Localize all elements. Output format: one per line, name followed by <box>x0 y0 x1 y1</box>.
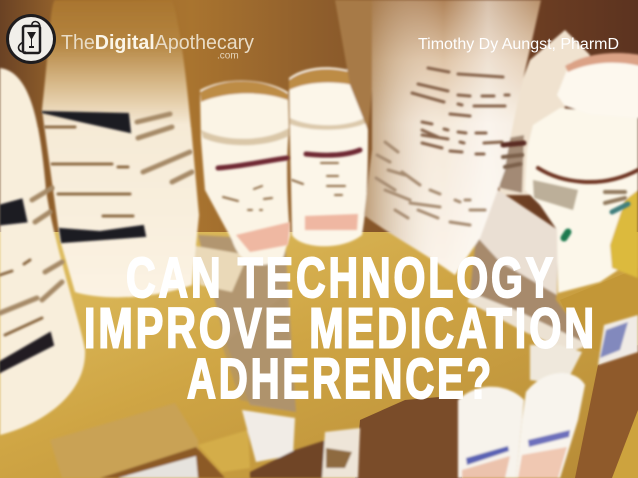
title: ADHERENCE? <box>187 347 494 411</box>
logo wordmark: TheDigitalApothecary <box>61 31 255 54</box>
far-left bottle <box>0 68 85 435</box>
author credit: Timothy Dy Aungst, PharmD <box>418 36 619 53</box>
logo .com: .com <box>217 50 239 62</box>
tan panel behind title, right <box>470 235 590 345</box>
logo: The Digital Apothecary <box>6 14 255 64</box>
yellow object right <box>610 190 638 278</box>
small bottle 1 <box>200 80 290 265</box>
large bottle <box>42 0 199 297</box>
logo badge <box>6 14 56 64</box>
white block <box>242 410 295 462</box>
photo: bottle labels <box>0 68 638 372</box>
right bottle <box>525 108 638 293</box>
dark strip and paper bag <box>335 0 374 130</box>
title <box>84 246 597 411</box>
lower shelf items <box>250 440 326 478</box>
bottom-left box <box>50 403 200 478</box>
back bottle and box on the right <box>496 30 590 195</box>
wedge behind title, left <box>198 235 296 412</box>
small bottle 2 <box>289 67 370 246</box>
